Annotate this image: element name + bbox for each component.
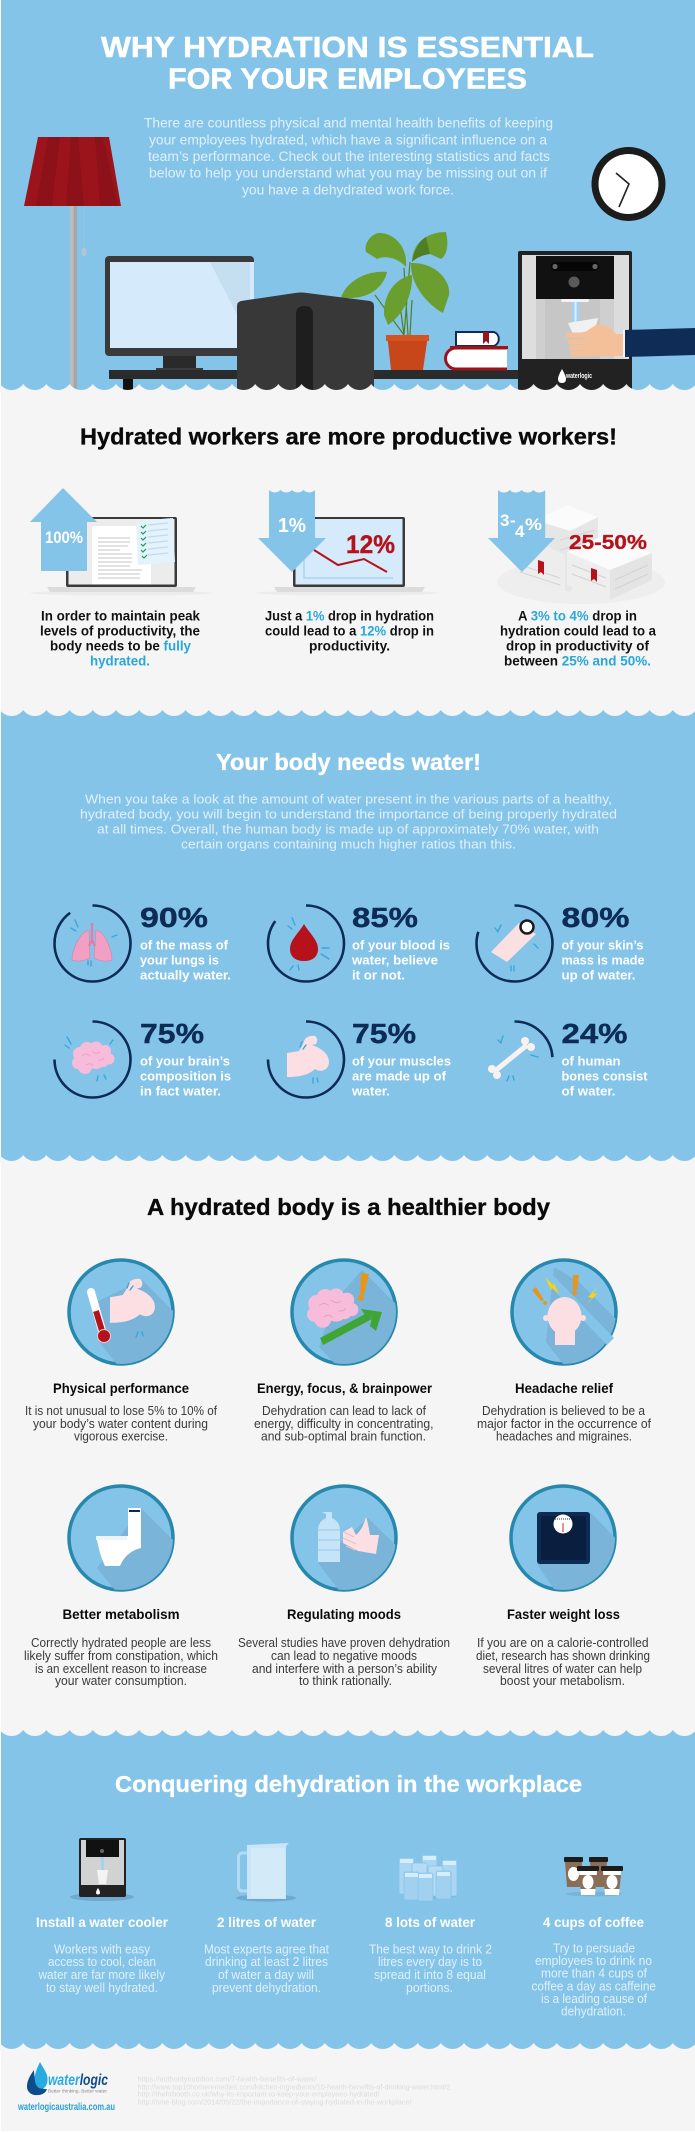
item: coffee cups: Try to persuade <box>553 1940 635 1956</box>
heading: Hydrated workers are more productive workers! <box>80 424 617 450</box>
stat: blood 85% <box>268 902 450 982</box>
text: 3 to 4% drop: A 3% to 4% drop in <box>518 608 637 624</box>
intro text: you have a dehydrated work force. <box>242 182 454 198</box>
item: glasses of water: The best way to drink 2 <box>369 1942 492 1956</box>
text: 3 to 4% drop <box>500 608 656 668</box>
item: coffee cups: employees to drink no <box>535 1953 652 1968</box>
stat: brain 75%: of your brain’s <box>140 1054 230 1068</box>
panel: footer <box>17 2062 450 2113</box>
item: coffee cups: is a leading cause of <box>541 1991 647 2006</box>
logo: waterlogic: Better thinking. Better water <box>48 2088 108 2094</box>
item: headache relief: headaches and migraines. <box>496 1430 632 1444</box>
title <box>101 32 594 96</box>
icon: office chair <box>237 292 374 392</box>
item: faster weight loss <box>476 1486 650 1688</box>
icon: paper stacks with arrow: - <box>510 511 516 530</box>
item: physical performance: It is not unusual to lose 5% to 10% of <box>25 1404 217 1418</box>
title: FOR YOUR EMPLOYEES <box>168 64 527 96</box>
wave edge <box>0 1155 695 1163</box>
text: 3 to 4% drop: drop in productivity of <box>506 638 649 654</box>
item: faster weight loss: diet, research has shown drinking <box>476 1649 650 1663</box>
icon: laptop with falling chart: 12% <box>346 531 395 559</box>
stat: bones 24%: 24% <box>562 1018 628 1049</box>
icon: paper stacks with arrow: 3 <box>500 511 509 530</box>
item: coffee cups: 4 cups of coffee <box>543 1914 644 1930</box>
paragraph: hydrated body, you will begin to understand the importance of being properly hydrated <box>80 806 617 822</box>
text: 1% drop: productivity. <box>309 638 390 654</box>
stat: skin 80%: 80% <box>562 902 630 933</box>
item: water cooler: to stay well hydrated. <box>46 1980 158 1995</box>
item: better metabolism: Better metabolism <box>62 1606 180 1622</box>
references: http://www.top10homeremedies.com/kitchen-ingredients/10-health-benefits-of-drinking-water.html/2 <box>138 2082 450 2092</box>
item: headache relief <box>477 1260 652 1444</box>
item: regulating moods: Regulating moods <box>287 1606 401 1622</box>
references: http://sme-blog.com/2014/05/22/the-importance-of-staying-hydrated-in-the-workplace/ <box>138 2098 412 2106</box>
stat: muscles 75%: 75% <box>352 1018 416 1049</box>
stat: brain 75% <box>54 1018 231 1098</box>
logo: waterlogic <box>27 2062 108 2095</box>
item: regulating moods: to think rationally. <box>299 1674 392 1688</box>
item: regulating moods: and interfere with a person’s ability <box>252 1662 438 1676</box>
item: coffee cups: more than 4 cups of <box>541 1966 647 1980</box>
icon: paper stacks with arrow: 25-50% <box>569 532 647 554</box>
stat: brain 75%: in fact water. <box>140 1084 221 1098</box>
stat: skin 80%: of your skin’s <box>562 938 644 952</box>
intro text: your employees hydrated, which have a significant influence on a <box>149 132 548 148</box>
icon: water cooler with hand <box>518 251 695 392</box>
item: physical performance: your body’s water content during <box>33 1417 208 1431</box>
item: jug of water: 2 litres of water <box>217 1914 317 1930</box>
panel: productivity <box>30 424 665 668</box>
intro text <box>144 116 553 198</box>
text: fully hydrated: body needs to be fully <box>50 638 191 654</box>
item: energy focus brainpower <box>254 1260 434 1444</box>
intro text: There are countless physical and mental health benefits of keeping <box>144 116 553 130</box>
text: 1% drop <box>265 608 434 654</box>
icon: paper stacks with arrow <box>488 490 665 604</box>
item: faster weight loss: boost your metabolism. <box>500 1674 625 1688</box>
icon: laptop with upward arrow <box>30 488 212 596</box>
icon: laptop with falling chart: 1% <box>278 514 306 537</box>
item: regulating moods <box>238 1486 450 1688</box>
item: glasses of water: spread it into 8 equal <box>374 1967 486 1982</box>
stat: skin 80% <box>476 902 644 982</box>
item: physical performance: vigorous exercise. <box>74 1430 168 1444</box>
references: http://thehrbooth.co.uk/why-its-important-to-keep-your-employees-hydrated/ <box>138 2090 380 2098</box>
stat: bones 24%: of water. <box>562 1084 616 1098</box>
icon: paper stacks with arrow: 4 <box>515 522 525 541</box>
item: water cooler: Install a water cooler <box>36 1914 169 1930</box>
item: regulating moods: can lead to negative moods <box>271 1649 417 1663</box>
paragraph: When you take a look at the amount of water present in the various parts of a healthy, <box>85 792 612 806</box>
item: water cooler: access to cool, clean <box>48 1954 156 1969</box>
item: better metabolism: is an excellent reason to increase <box>35 1662 207 1676</box>
item: faster weight loss: Faster weight loss <box>507 1606 620 1622</box>
item: regulating moods: Several studies have proven dehydration <box>238 1636 450 1650</box>
item: glasses of water <box>369 1855 492 1995</box>
stat: lungs 90%: 90% <box>140 902 208 933</box>
icon: floor lamp <box>24 137 121 392</box>
item: jug of water: Most experts agree that <box>204 1942 329 1956</box>
item: physical performance <box>25 1260 217 1444</box>
wave edge <box>0 384 695 392</box>
stat: brain 75%: composition is <box>140 1068 231 1084</box>
paragraph: certain organs containing much higher ratios than this. <box>181 836 516 852</box>
stat: muscles 75%: water. <box>351 1084 390 1098</box>
panel: conquering dehydration <box>0 1730 695 2051</box>
item: water cooler <box>36 1838 169 1995</box>
icon: desk <box>109 370 521 392</box>
item: headache relief: major factor in the occurrence of <box>477 1417 652 1431</box>
item: jug of water: drinking at least 2 litres <box>205 1954 328 1969</box>
item: better metabolism <box>24 1486 218 1688</box>
stat: skin 80%: mass is made <box>562 952 644 968</box>
stat: blood 85%: 85% <box>352 902 418 933</box>
item: faster weight loss: several litres of water can help <box>483 1662 642 1676</box>
references: https://authoritynutrition.com/7-health-benefits-of-water/ <box>138 2074 317 2084</box>
item: physical performance: Physical performance <box>53 1380 189 1396</box>
stat: bones 24%: bones consist <box>562 1068 648 1084</box>
item: coffee cups: coffee a day as caffeine <box>532 1978 656 1994</box>
item: coffee cups: dehydration. <box>561 2004 626 2018</box>
stat: lungs 90%: of the mass of <box>140 938 229 952</box>
stat: blood 85%: it or not. <box>352 968 405 982</box>
paragraph <box>80 792 617 852</box>
item: better metabolism: Correctly hydrated people are less <box>31 1636 211 1650</box>
text: fully hydrated: levels of productivity, the <box>40 624 200 638</box>
intro text: team’s performance. Check out the interesting statistics and facts <box>148 149 550 164</box>
item: energy focus brainpower: Dehydration can lead to lack of <box>262 1404 426 1418</box>
heading: A hydrated body is a healthier body <box>147 1194 550 1220</box>
heading: Conquering dehydration in the workplace <box>115 1771 582 1797</box>
item: glasses of water: portions. <box>406 1980 453 1995</box>
intro text: below to help you understand what you may be missing out on if <box>149 166 547 180</box>
text: fully hydrated: In order to maintain peak <box>41 608 200 624</box>
item: headache relief: Headache relief <box>515 1380 613 1396</box>
item: better metabolism: likely suffer from constipation, which <box>24 1649 218 1663</box>
icon: wall clock <box>592 147 666 221</box>
panel: body needs water <box>0 710 695 1163</box>
item: energy focus brainpower: and sub-optimal brain function. <box>261 1430 426 1444</box>
item: better metabolism: your water consumption. <box>55 1674 187 1688</box>
stat: muscles 75% <box>268 1018 451 1098</box>
stat: muscles 75%: are made up of <box>352 1068 447 1084</box>
text: 3 to 4% drop: hydration could lead to a <box>500 624 656 638</box>
text: fully hydrated: hydrated. <box>90 654 150 668</box>
panel: header <box>0 0 695 392</box>
text: 1% drop: Just a 1% drop in hydration <box>265 608 434 624</box>
item: faster weight loss: If you are on a calorie-controlled <box>477 1636 649 1650</box>
stat: muscles 75%: of your muscles <box>352 1054 451 1068</box>
icon: laptop with falling chart <box>256 490 438 596</box>
stat: bones 24%: of human <box>562 1054 621 1068</box>
stat: lungs 90%: actually water. <box>140 968 231 982</box>
title: WHY HYDRATION IS ESSENTIAL <box>101 32 594 64</box>
paragraph: at all times. Overall, the human body is made up of approximately 70% water, with <box>97 822 599 836</box>
item: jug of water: prevent dehydration. <box>212 1980 321 1995</box>
stat: lungs 90% <box>54 902 231 982</box>
website link: waterlogicaustralia.com.au <box>17 2102 115 2113</box>
wave edge <box>0 2043 695 2051</box>
item: headache relief: Dehydration is believed to be a <box>482 1404 645 1418</box>
stat: bones 24% <box>476 1018 648 1098</box>
icon: books <box>446 332 508 369</box>
icon: paper stacks with arrow: % <box>525 515 542 534</box>
item: coffee cups <box>532 1857 656 2018</box>
text: 3 to 4% drop: between 25% and 50%. <box>504 654 651 668</box>
stat: blood 85%: of your blood is <box>352 938 450 952</box>
references <box>138 2074 450 2106</box>
item: glasses of water: litres every day is to <box>378 1954 482 1969</box>
panel: healthier body <box>24 1194 652 1688</box>
item: glasses of water: 8 lots of water <box>385 1914 476 1930</box>
item: energy focus brainpower: Energy, focus, & brainpower <box>257 1380 433 1396</box>
logo: waterlogic: waterlogic <box>48 2072 108 2089</box>
item: jug of water <box>204 1843 329 1995</box>
stat: blood 85%: water, believe <box>351 952 438 968</box>
icon: computer monitor <box>105 256 254 371</box>
text: 1% drop: could lead to a 12% drop in <box>265 624 434 638</box>
heading: Your body needs water! <box>216 749 481 775</box>
icon: water cooler with hand: waterlogic <box>565 373 592 380</box>
item: jug of water: of water a day will <box>218 1967 314 1982</box>
item: water cooler: Workers with easy <box>54 1942 150 1956</box>
item: water cooler: water are far more likely <box>38 1967 165 1982</box>
stat: skin 80%: up of water. <box>562 968 636 982</box>
stat: lungs 90%: your lungs is <box>140 952 219 968</box>
icon: laptop with upward arrow: 100% <box>45 529 83 547</box>
stat: brain 75%: 75% <box>140 1018 204 1049</box>
item: energy focus brainpower: energy, difficulty in concentrating, <box>254 1417 434 1431</box>
icon: plant <box>341 232 449 370</box>
text: fully hydrated <box>40 608 200 668</box>
